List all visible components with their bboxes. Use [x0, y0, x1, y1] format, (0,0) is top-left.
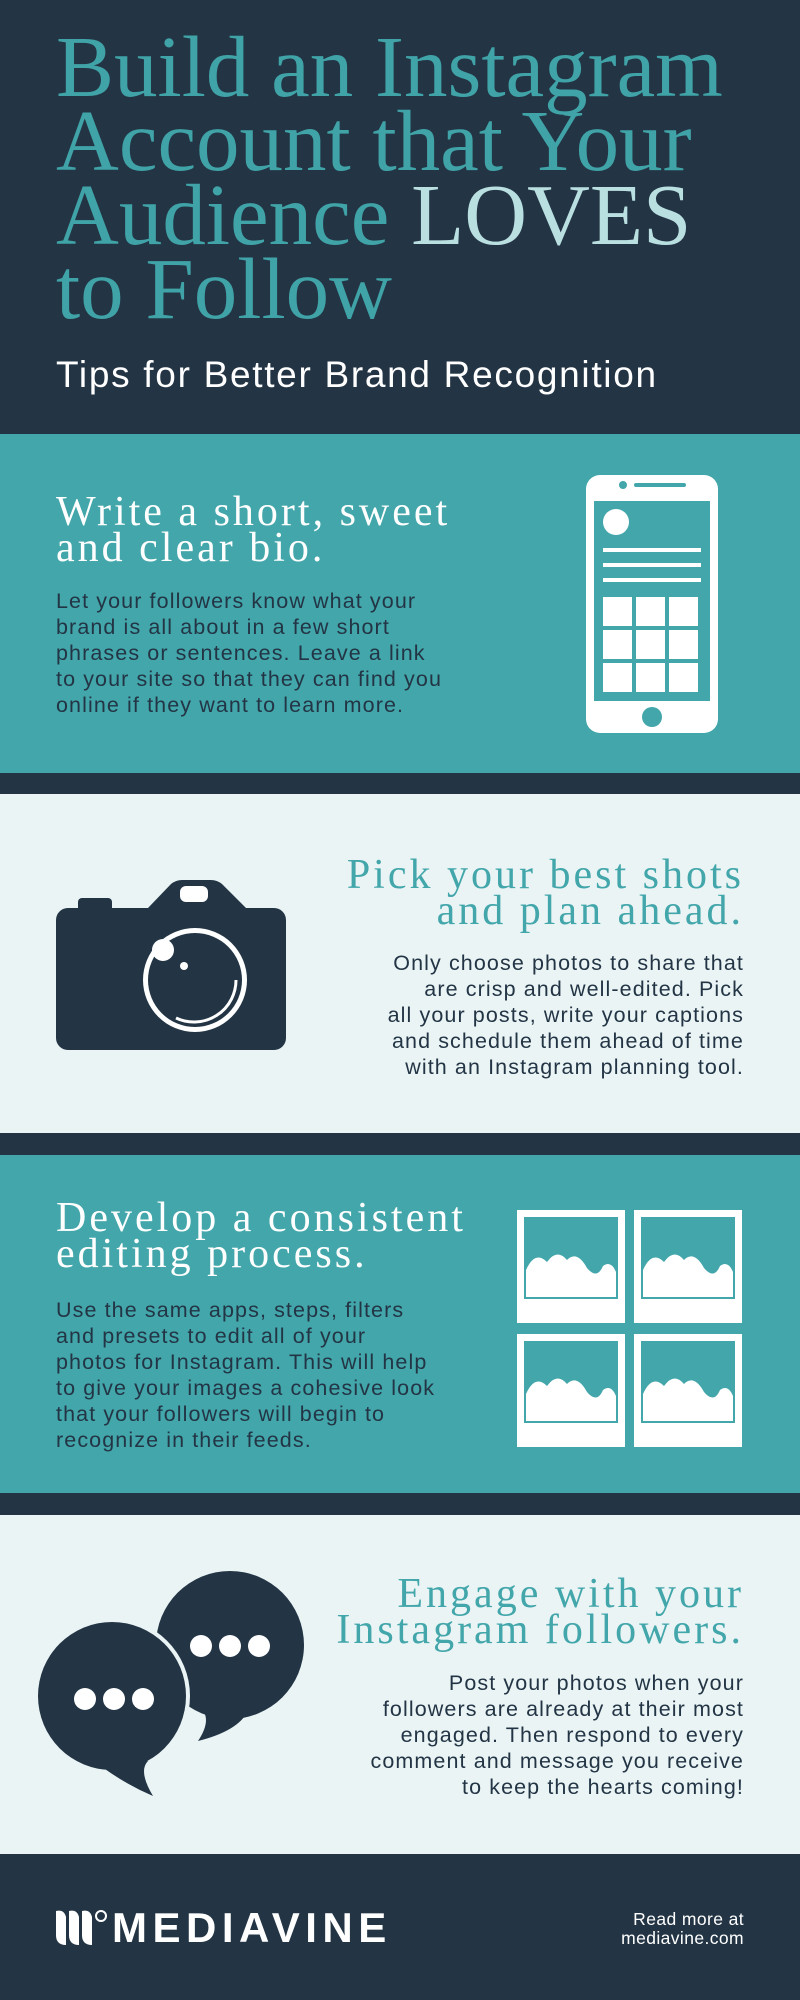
text: shots [388, 951, 744, 1079]
text: editing: recognize in their feeds. [56, 1428, 312, 1452]
title: to Follow [56, 240, 392, 337]
text: engage: to keep the hearts coming! [462, 1775, 744, 1799]
text: editing [56, 1298, 435, 1452]
text: editing: photos for Instagram. This will help [56, 1350, 427, 1374]
footer link text: mediavine.com [621, 1928, 744, 1948]
text: bio [56, 589, 442, 717]
text: shots: with an Instagram planning tool. [405, 1055, 744, 1079]
footer link text: Read more at [633, 1909, 744, 1929]
title: Account that Your [56, 92, 692, 189]
heading: editing: editing process. [56, 1231, 368, 1277]
icon: photo grid [517, 1210, 742, 1447]
text: engage: followers are already at their most [383, 1697, 744, 1721]
heading: shots: Pick your best shots [347, 852, 744, 898]
title: Build an Instagram [56, 18, 723, 115]
text: bio: phrases or sentences. Leave a link [56, 641, 426, 665]
heading: bio [56, 489, 450, 571]
panel: editing [0, 1155, 800, 1493]
heading: bio: and clear bio. [56, 525, 325, 571]
text: engage: Post your photos when your [449, 1671, 744, 1695]
heading: editing [56, 1195, 466, 1277]
panel: shots [0, 794, 800, 1133]
icon: phone [586, 475, 718, 733]
heading: engage [336, 1571, 744, 1653]
panel: engage [0, 1515, 800, 1854]
heading: bio: Write a short, sweet [56, 489, 450, 535]
text: editing: that your followers will begin to [56, 1402, 385, 1426]
text: editing: Use the same apps, steps, filters [56, 1298, 404, 1322]
panel: bio [0, 434, 800, 773]
heading: shots: and plan ahead. [437, 888, 744, 934]
heading: editing: Develop a consistent [56, 1195, 466, 1241]
heading: engage: Instagram followers. [336, 1607, 744, 1653]
heading: shots [347, 852, 744, 934]
text: bio: Let your followers know what your [56, 589, 416, 613]
text: editing: and presets to edit all of your [56, 1324, 366, 1348]
subtitle: Tips for Better Brand Recognition [56, 354, 658, 395]
text: shots: Only choose photos to share that [393, 951, 744, 975]
text: bio: to your site so that they can find you [56, 667, 442, 691]
footer link text [621, 1909, 744, 1948]
text: engage [370, 1671, 744, 1799]
title: Audience LOVES [56, 166, 691, 263]
text: shots: and schedule them ahead of time [392, 1029, 744, 1053]
text: bio: online if they want to learn more. [56, 693, 404, 717]
text: engage: comment and message you receive [370, 1749, 744, 1773]
text: editing: to give your images a cohesive look [56, 1376, 435, 1400]
heading: engage: Engage with your [397, 1571, 744, 1617]
text: shots: all your posts, write your captions [388, 1003, 744, 1027]
text: bio: brand is all about in a few short [56, 615, 390, 639]
icon: camera [56, 880, 286, 1050]
icon: chat bubbles [38, 1571, 304, 1796]
text: shots: are crisp and well-edited. Pick [424, 977, 744, 1001]
footer logo: MEDIAVINE [112, 1904, 392, 1951]
title [56, 18, 723, 337]
text: engage: engaged. Then respond to every [401, 1723, 744, 1747]
